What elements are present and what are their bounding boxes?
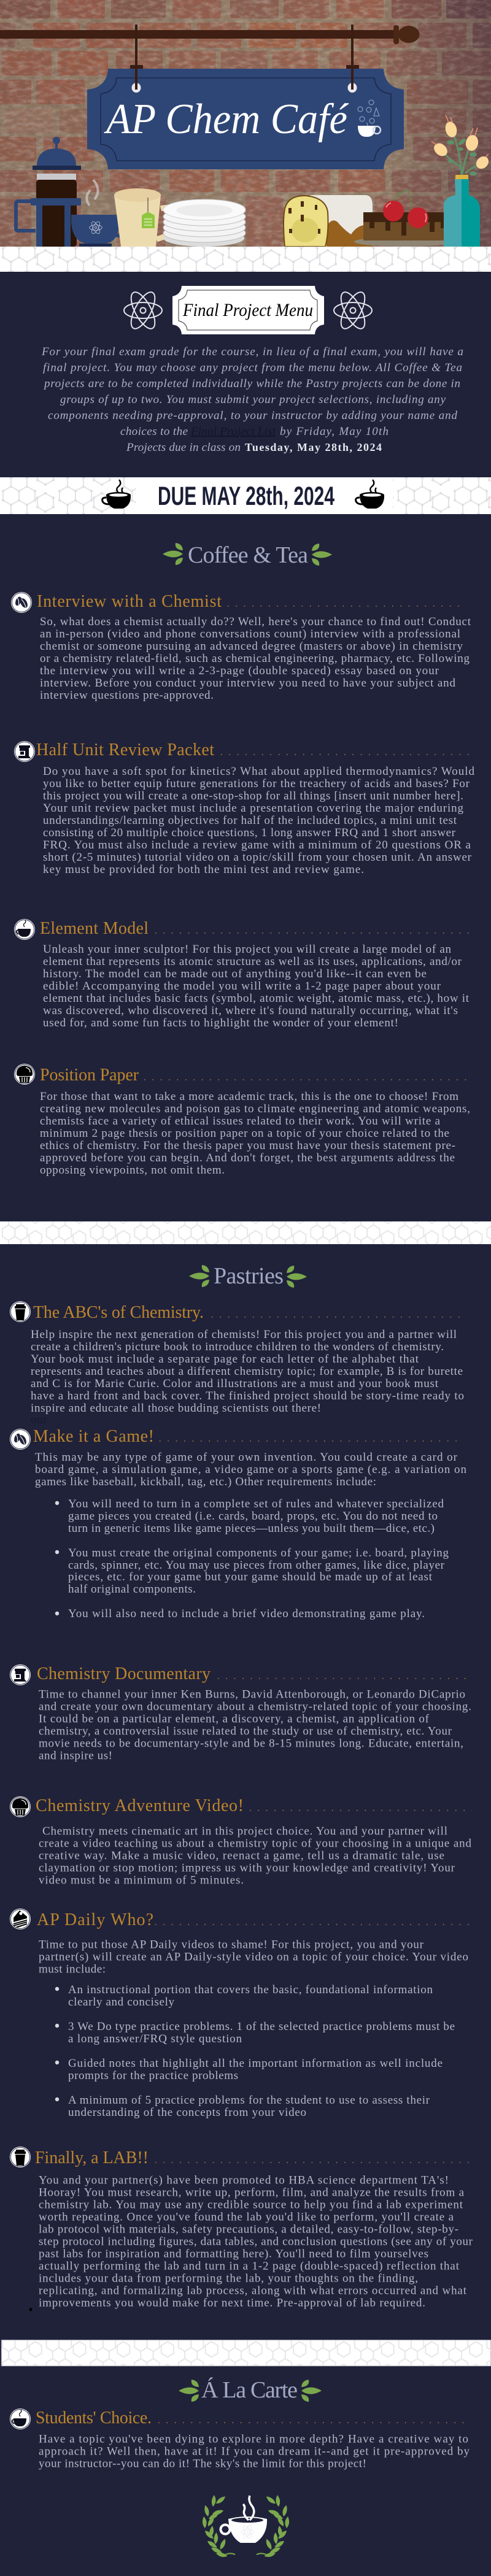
intro text: components needing pre-approval, to your instructor by adding your name and bbox=[48, 409, 458, 422]
item: AP Daily Who?: clearly and concisely bbox=[68, 1996, 174, 2009]
item: Make it a Game!: board game, a simulation game, a video game or a sports game (e.g. a variation on bbox=[35, 1463, 466, 1476]
item: Position Paper: chemists face a variety of ethical issues related to their work. You will write a bbox=[40, 1115, 441, 1128]
heading: À La Carte: Á La Carte bbox=[201, 2377, 298, 2403]
item: Interview with a Chemist: the interview you will write a 2-3-page (double spaced) essay based on your bbox=[40, 664, 439, 677]
item: Element Model: edible! Accompanying the model you will write a 1-2 page paper about your bbox=[43, 980, 441, 993]
item: Finally, a LAB!!: step protocol including figures, data tables, and conclusion questions (see any of your bbox=[39, 2236, 473, 2248]
item: Chemistry Adventure Video!: video must be a minimum of 5 minutes. bbox=[39, 1874, 244, 1887]
illustration: plates bbox=[163, 199, 246, 247]
item: The ABC's of Chemistry: have a hard front and back cover. The finished project should be story-time ready to bbox=[31, 1390, 464, 1402]
item: Finally, a LAB!!: improvements you would make for next time. Pre-approval of lab required. bbox=[39, 2297, 425, 2309]
item: Half Unit Review Packet: FRQ. You must also include a review game with a minimum of 20 questions OR a bbox=[43, 839, 471, 852]
item: Make it a Game!: You must create the original components of your game; i.e. board, playing bbox=[68, 1547, 449, 1559]
item: Interview with a Chemist bbox=[11, 592, 471, 702]
item: Finally, a LAB!!: Finally, a LAB!! bbox=[35, 2148, 149, 2167]
item: AP Daily Who?: partner(s) will create an AP Daily-style video on a topic of your choice. Your video bbox=[39, 1951, 468, 1963]
icon: coffee cup right bbox=[356, 480, 384, 509]
item: Students' Choice.: approach it? Well then, have at it! If you can dream it--and get it pre-approved by bbox=[39, 2445, 470, 2458]
item: Half Unit Review Packet: Do you have a soft spot for kinetics? What about applied thermodynamics? Would bbox=[43, 765, 474, 778]
band: molecule pattern bbox=[0, 247, 491, 272]
item: The ABC's of Chemistry: inspire and educate all those budding scientists out there! bbox=[31, 1402, 321, 1415]
item: Make it a Game!: cards, spinner, etc. You may use pieces from other games, like dice, player bbox=[68, 1559, 445, 1572]
item: Position Paper: ethics of chemistry. For the thesis paper you must have your thesis statement pre- bbox=[40, 1139, 455, 1152]
icon: coffee cup left bbox=[102, 480, 131, 509]
title: AP Chem Café bbox=[104, 96, 349, 143]
heading: Pastries: Pastries bbox=[214, 1263, 284, 1289]
item: AP Daily Who?: An instructional portion that covers the basic, foundational information bbox=[68, 1983, 433, 1996]
item: Element Model: Unleash your inner sculptor! For this project you will create a large model of an bbox=[43, 943, 452, 956]
item: Position Paper: Position Paper bbox=[40, 1066, 139, 1085]
item: Position Paper: approved before you can begin. And don't forget, the best arguments address the bbox=[40, 1152, 455, 1164]
item: Finally, a LAB!!: Hooray! You must research, write up, perform, film, and analyze the results from a bbox=[39, 2186, 465, 2199]
item: Make it a Game!: You will also need to include a brief video demonstrating game play. bbox=[68, 1607, 425, 1620]
item: Element Model: used for, and some fun facts to highlight the wonder of your element! bbox=[43, 1017, 398, 1029]
icon: chem cup bbox=[358, 100, 381, 137]
heading: Coffee & Tea: Coffee & Tea bbox=[188, 542, 308, 568]
intro text: Final Project List bbox=[190, 425, 276, 438]
sign: AP Chem Café bbox=[87, 25, 404, 169]
item: Interview with a Chemist: an in-person (video and phone conversations count) interview with a professional bbox=[40, 628, 460, 640]
due date banner: DUE MAY 28th, 2024 bbox=[158, 482, 334, 511]
item: Element Model bbox=[14, 919, 472, 1029]
item: Interview with a Chemist: chemist or someone pursuing an advanced degree (masters or above) in chemistry bbox=[40, 640, 463, 653]
item: Finally, a LAB!!: worth repeating. Once you've found the lab you'd like to perform, you'll create a bbox=[39, 2211, 454, 2223]
intro text: by Friday, May 10th bbox=[280, 425, 389, 438]
item: Chemistry Documentary: movie needs to be documentary-style and be 8-15 minutes long. Educate, entertain, bbox=[39, 1737, 463, 1750]
icon: atom right bbox=[334, 289, 372, 332]
band: molecule pattern 3 bbox=[1, 2340, 491, 2366]
item: Half Unit Review Packet: understandings/learning objectives for half of the included topics, a mini unit test bbox=[43, 814, 457, 827]
item: Half Unit Review Packet: key must be provided for both the mini test and review game. bbox=[43, 863, 364, 876]
item: The ABC's of Chemistry bbox=[10, 1301, 466, 1426]
item: Element Model: element that includes basic facts (symbol, atomic weight, atomic mass, etc.), how it bbox=[43, 992, 470, 1005]
item: Half Unit Review Packet: you like to better equip future generations for the treachery of acids and bases? For bbox=[43, 777, 470, 790]
item: Finally, a LAB!!: includes your data from performing the lab, your thoughts on the finding, bbox=[39, 2272, 418, 2285]
item: Finally, a LAB!!: You and your partner(s) have been promoted to HBA science department TA's! bbox=[39, 2174, 449, 2186]
item: Finally, a LAB!!: lab protocol with materials, safety precautions, a detailed, easy-to-follow, step-by- bbox=[39, 2223, 458, 2236]
item: The ABC's of Chemistry: Help inspire the next generation of chemists! For this project you and a partner will bbox=[31, 1328, 457, 1341]
item: Finally, a LAB!!: replicating, and formalizing lab process, along with what errors occurred and what bbox=[39, 2285, 467, 2297]
item: The ABC's of Chemistry: represents and teaches about a different chemistry topic; for example, B is for burette bbox=[31, 1365, 463, 1378]
item: AP Daily Who?: AP Daily Who? bbox=[37, 1910, 153, 1929]
plaque title: Final Project Menu bbox=[182, 300, 313, 320]
item: Chemistry Adventure Video!: Chemistry Adventure Video! bbox=[36, 1796, 244, 1815]
due date banner bbox=[0, 477, 491, 514]
item: Half Unit Review Packet: Half Unit Review Packet bbox=[36, 740, 214, 759]
item: Finally, a LAB!!: past labs for inspiration and formatting here). You'll need to film yourselves bbox=[39, 2248, 428, 2260]
item: The ABC's of Chemistry: The ABC's of Chemistry. bbox=[33, 1303, 204, 1322]
illustration: chocolate cake with cherries bbox=[354, 190, 456, 247]
item: AP Daily Who?: understanding of the concepts from your video bbox=[68, 2106, 306, 2119]
item: The ABC's of Chemistry: Your book must include a separate page for each letter of the alphabet that bbox=[31, 1353, 419, 1366]
icon: atom left bbox=[124, 289, 162, 332]
item: Make it a Game!: This may be any type of game of your own invention. You could create a card or bbox=[35, 1451, 458, 1464]
emblem: laurel wreath with cup bbox=[203, 2495, 289, 2559]
item: Make it a Game!: pieces, etc. for your game but your game should be made up of at least bbox=[68, 1571, 433, 1583]
item: AP Daily Who?: 3 We Do type practice problems. 1 of the selected practice problems must be bbox=[68, 2020, 455, 2033]
item: Chemistry Documentary: It could be on a particular element, a discovery, a chemist, an application of bbox=[39, 1713, 430, 1725]
item: Element Model: element that represents its atomic structure as well as its uses, applications, and/or bbox=[43, 955, 462, 968]
intro text: final project. You may choose any project from the menu below. All Coffee & Tea bbox=[43, 361, 462, 374]
item: Finally, a LAB!!: actually performing the lab and turn in a 1-2 page (double-spaced) reflection that bbox=[39, 2260, 460, 2272]
item: Chemistry Documentary: Time to channel your inner Ken Burns, David Attenborough, or Leonardo DiCaprio bbox=[39, 1688, 465, 1701]
item: Element Model: was discovered, who discovered it, where it's found naturally occurring, what it's bbox=[43, 1004, 458, 1017]
item: Chemistry Adventure Video!: creative way. Make a music video, reenact a game, tell us a dramatic tale, use bbox=[39, 1849, 444, 1863]
intro text bbox=[41, 345, 463, 454]
item: AP Daily Who?: must include: bbox=[39, 1963, 106, 1975]
heading: Pastries bbox=[189, 1263, 307, 1289]
item: The ABC's of Chemistry: and C is for Marie Curie. Color and illustrations are a must and your book must bbox=[31, 1377, 439, 1390]
item: Students' Choice. bbox=[10, 2409, 470, 2470]
item: Make it a Game!: games like baseball, kickball, tag, etc.) Other requirements include: bbox=[35, 1475, 376, 1488]
item: Chemistry Adventure Video!: create a video teaching us about a chemistry topic of your choosing in a unique and bbox=[39, 1837, 472, 1850]
intro text: choices to the bbox=[120, 425, 188, 438]
item: Finally, a LAB!!: chemistry lab. You may use any credible source to help you find a lab experiment bbox=[39, 2199, 463, 2211]
item: The ABC's of Chemistry: our bbox=[31, 1413, 48, 1426]
illustration: steam bbox=[87, 180, 98, 206]
item: AP Daily Who?: Guided notes that highlight all the important information as well include bbox=[68, 2057, 443, 2070]
item: Position Paper: For those that want to take a more academic track, this is the one to choose! From bbox=[40, 1090, 458, 1103]
item: AP Daily Who?: A minimum of 5 practice problems for the student to use to assess their bbox=[68, 2094, 430, 2107]
item: AP Daily Who?: Time to put those AP Daily videos to shame! For this project, you and your bbox=[39, 1939, 424, 1951]
item: Chemistry Documentary: Chemistry Documentary bbox=[37, 1664, 211, 1683]
item: Position Paper: opposing viewpoints, not omit them. bbox=[40, 1164, 225, 1177]
item: Make it a Game!: half original components. bbox=[68, 1583, 196, 1596]
item: Element Model: Element Model bbox=[40, 919, 149, 938]
item: Chemistry Adventure Video!: Chemistry meets cinematic art in this project choice. You and your partner will bbox=[42, 1824, 447, 1838]
item: Students' Choice.: Have a topic you've been dying to explore in more depth? Have a creative way to bbox=[39, 2433, 468, 2445]
intro text: groups of up to two. You must submit your project selections, including any bbox=[60, 393, 446, 406]
band: molecule pattern 2 bbox=[0, 1221, 491, 1244]
item: AP Daily Who?: prompts for the practice problems bbox=[68, 2069, 238, 2082]
item: Interview with a Chemist: interview questions pre-approved. bbox=[40, 689, 214, 702]
intro text: projects are to be completed individually while the Pastry projects can be done in bbox=[43, 377, 460, 390]
item: Position Paper: creating new molecules and poison gas to climate engineering and atomic weapons, bbox=[40, 1102, 470, 1115]
item: Finally, a LAB!! bbox=[10, 2147, 473, 2311]
illustration: tea mug bbox=[114, 188, 179, 247]
intro text: Tuesday, May 28th, 2024 bbox=[245, 441, 382, 453]
item: Students' Choice.: Students' Choice. bbox=[36, 2409, 152, 2428]
intro text: For your final exam grade for the course, in lieu of a final exam, you will have a bbox=[41, 345, 463, 358]
heading: À La Carte bbox=[179, 2377, 322, 2403]
item: Make it a Game!: Make it a Game! bbox=[33, 1427, 154, 1446]
item: AP Daily Who? bbox=[10, 1909, 471, 2119]
item: Half Unit Review Packet: short (2-5 minutes) tutorial video on a topic/skill from your chosen unit. An answer bbox=[43, 851, 472, 864]
item: Chemistry Documentary: and create your own documentary about a chemistry-related topic of your choosing. bbox=[39, 1701, 471, 1713]
item: Make it a Game!: turn in generic items like game pieces—unless you built them—dice, etc.) bbox=[68, 1522, 435, 1535]
item: Chemistry Adventure Video! bbox=[10, 1796, 472, 1887]
item: Make it a Game!: game pieces you created (i.e. cards, board, props, etc. You do not need to bbox=[68, 1510, 438, 1523]
item: Students' Choice.: your instructor--you can do it! The sky's the limit for this project! bbox=[39, 2458, 366, 2470]
item: Interview with a Chemist: Interview with a Chemist bbox=[37, 592, 222, 611]
item: Half Unit Review Packet: consisting of 20 multiple choice questions, 1 long answer FRQ and 1 short answer bbox=[43, 826, 456, 839]
item: Position Paper: minimum 2 page thesis or position paper on a topic of your choice related to the bbox=[40, 1127, 449, 1140]
item: Chemistry Adventure Video!: claymation or stop motion; impress us with your knowledge and creativity! Your bbox=[39, 1861, 455, 1875]
icon: curtain rod bbox=[0, 25, 420, 44]
illustration: bread loaf bbox=[284, 195, 373, 247]
item: Interview with a Chemist: interview. Before you conduct your interview you need to have your subject and bbox=[40, 677, 455, 690]
illustration: vase with flowers bbox=[431, 115, 491, 247]
item: Chemistry Documentary bbox=[10, 1664, 471, 1762]
plaque: Final Project Menu bbox=[172, 286, 324, 334]
item: Half Unit Review Packet: this project you will create a one-stop-shop for all things [insert unit number here]. bbox=[43, 790, 463, 802]
item: Chemistry Documentary: chemistry, a controversial issue related to the study or use of chemistry, etc. Your bbox=[39, 1725, 452, 1737]
item: Make it a Game! bbox=[10, 1427, 466, 1620]
header illustration: brick wall bbox=[0, 0, 491, 247]
illustration: navy atom cup bbox=[71, 215, 125, 247]
item: Make it a Game!: You will need to turn in a complete set of rules and whatever specialized bbox=[68, 1498, 444, 1510]
item: Interview with a Chemist: So, what does a chemist actually do?? Well, here's your chance to find out! Conduct bbox=[40, 615, 471, 628]
item: The ABC's of Chemistry: create a children's picture book to introduce children to the wonders of chemistry. bbox=[31, 1340, 444, 1353]
item: Half Unit Review Packet: Your unit review packet must include a presentation covering the major enduring bbox=[43, 802, 464, 815]
item: Chemistry Documentary: and inspire us! bbox=[39, 1750, 112, 1762]
item: Half Unit Review Packet bbox=[14, 740, 474, 876]
intro text: Projects due in class on bbox=[126, 441, 241, 454]
illustration: french press bbox=[16, 137, 81, 247]
item: Interview with a Chemist: or a chemistry related-field, such as chemical engineering, pharmacy, etc. Following bbox=[40, 652, 470, 665]
item: Element Model: history. The model can be made out of anything you'd like--it can even be bbox=[43, 967, 427, 980]
item: AP Daily Who?: a long answer/FRQ style question bbox=[68, 2032, 242, 2045]
item: Position Paper bbox=[14, 1064, 473, 1177]
